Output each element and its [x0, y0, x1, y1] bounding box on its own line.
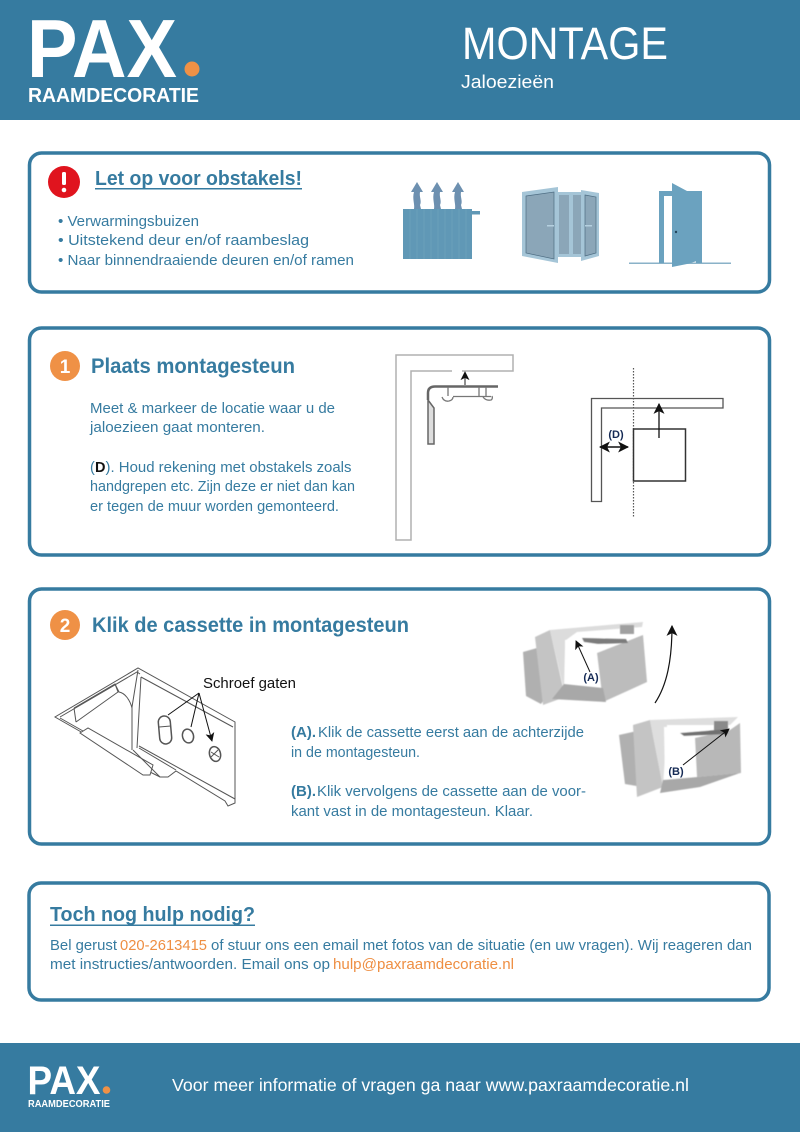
step 1 instructions: jaloezieen gaat monteren.: [89, 420, 265, 436]
step 2 instructions: (B).: [291, 783, 316, 800]
help text: Bel gerust: [50, 938, 117, 954]
heading: help: Toch nog hulp nodig?: [50, 904, 255, 926]
heading: step 2: Klik de cassette in montagesteun: [92, 614, 409, 637]
photo: cassette step A: [523, 622, 647, 705]
step 2 instructions: [291, 724, 586, 820]
label: screw holes with arrows: Schroef gaten: [203, 675, 296, 692]
diagram: measure distance D: [592, 368, 723, 517]
step 2 instructions: (A).: [291, 724, 316, 741]
icon: warning: [48, 166, 80, 198]
step 1 instructions: er tegen de muur worden gemonteerd.: [90, 499, 339, 515]
step 1 instructions: handgrepen etc. Zijn deze er niet dan kan: [90, 479, 355, 495]
arrow: movement from B to A: [655, 626, 672, 703]
badge: step 1: [50, 351, 80, 381]
footer logo: RAAMDECORATIE: [28, 1099, 110, 1110]
footer logo: PAX: [28, 1059, 101, 1103]
obstacle list: • Verwarmingsbuizen: [58, 214, 199, 230]
photo: cassette step B: [619, 717, 741, 797]
panel: help: [29, 883, 769, 1000]
step 1 instructions: [89, 401, 355, 515]
help text: 020-2613415: [120, 938, 207, 954]
heading: step 1: Plaats montagesteun: [91, 355, 295, 378]
diagram: bracket on wall: [396, 355, 513, 540]
step 2 instructions: in de montagesteun.: [291, 745, 420, 761]
icon: open door: [629, 183, 731, 267]
badge: step 1: 1: [60, 357, 71, 378]
panel: step 2: [30, 589, 770, 844]
icon: open window: [522, 187, 599, 263]
label: screw holes with arrows: [168, 675, 296, 741]
badge: step 2: 2: [60, 616, 70, 637]
obstacle list: [58, 214, 354, 269]
footer band: [0, 1043, 800, 1132]
help text: [50, 938, 752, 973]
step 2 instructions: kant vast in de montagesteun. Klaar.: [291, 804, 533, 820]
footer text: Voor meer informatie of vragen ga naar www.paxraamdecoratie.nl: [172, 1075, 689, 1095]
obstacle list: • Naar binnendraaiende deuren en/of ramen: [58, 253, 354, 269]
heading: obstacles: Let op voor obstakels!: [95, 168, 302, 190]
title: MONTAGE: [462, 18, 668, 69]
icon: radiator: [403, 182, 480, 259]
panel: obstacles warning: [30, 153, 770, 292]
diagram: measure distance D: (D): [608, 429, 624, 441]
obstacle list: • Uitstekend deur en/of raambeslag: [58, 233, 309, 249]
logo: PAX Raamdecoratie: PAX: [27, 2, 177, 95]
badge: step 2: [50, 610, 80, 640]
help text: met instructies/antwoorden. Email ons op: [50, 957, 330, 973]
step 1 instructions: Meet & markeer de locatie waar u de: [90, 401, 335, 417]
help text: hulp@paxraamdecoratie.nl: [333, 957, 514, 973]
step 1 instructions: (: [90, 460, 95, 476]
subtitle: Jaloezieën: [461, 72, 554, 92]
step 2 instructions: Klik de cassette eerst aan de achterzijde: [318, 725, 584, 741]
photo: cassette step A: (A): [583, 672, 599, 684]
help text: of stuur ons een email met fotos van de situatie (en uw vragen). Wij reageren dan: [211, 938, 752, 954]
step 1 instructions: ). Houd rekening met obstakels zoals: [106, 460, 352, 476]
photo: cassette step B: (B): [668, 766, 684, 778]
diagram: cassette with screw holes: [55, 668, 235, 806]
panel: step 1: [30, 328, 770, 555]
step 2 instructions: Klik vervolgens de cassette aan de voor-: [317, 784, 586, 800]
logo: PAX Raamdecoratie: RAAMDECORATIE: [28, 85, 199, 107]
header band: [0, 0, 800, 120]
step 1 instructions: D: [95, 460, 105, 476]
